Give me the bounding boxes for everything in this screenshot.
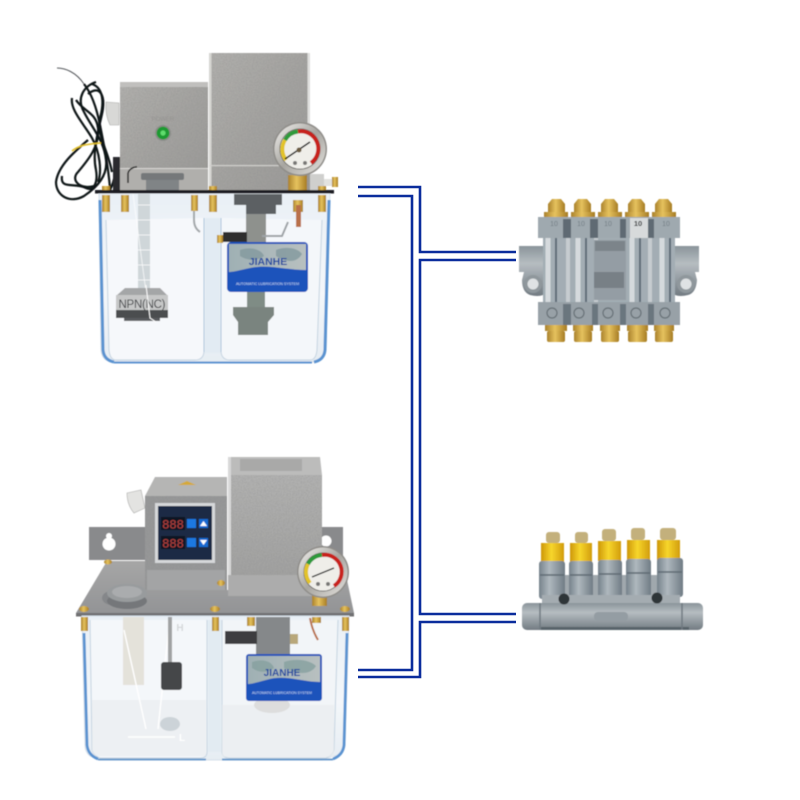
controller housing	[145, 477, 227, 590]
brass gauge fitting	[288, 175, 307, 191]
brass outlet nuts: top	[544, 199, 676, 217]
top band with flow numbers: 10	[634, 219, 642, 228]
float sensor	[161, 617, 182, 690]
button: up	[199, 519, 208, 528]
upper lubrication pump	[56, 53, 338, 362]
mounting bracket	[89, 527, 343, 567]
cable gland	[106, 102, 119, 125]
pump body	[225, 617, 318, 713]
level sensor stem	[133, 194, 150, 294]
display: lower: 888	[162, 538, 184, 552]
top plate	[95, 190, 334, 194]
digital timer panel	[155, 503, 215, 563]
lower five-port distributor	[522, 528, 703, 630]
high mark: H	[176, 623, 184, 634]
motor housing	[209, 53, 310, 191]
motor housing	[228, 457, 322, 596]
collar shadows	[540, 572, 682, 575]
pipe: riser between distributors	[420, 260, 516, 614]
top band with flow numbers: 10	[577, 221, 585, 228]
left mounting ear	[519, 246, 545, 296]
JIANHE label	[246, 654, 322, 701]
outlet necks	[546, 528, 676, 543]
button: function lower	[187, 538, 196, 547]
brass screws	[79, 560, 350, 631]
power indicator	[155, 125, 171, 141]
top plate	[76, 561, 354, 616]
mounting holes	[558, 592, 662, 604]
pipe: upper pump to upper distributor	[358, 187, 516, 252]
pressure gauge	[297, 546, 349, 598]
thin wire ends	[57, 68, 84, 84]
NPN float sensor	[116, 285, 168, 322]
JIANHE label: JIANHE	[249, 256, 287, 268]
top band with flow numbers: 10	[662, 221, 670, 228]
JIANHE label: AUTOMATIC LUBRICATION SYSTEM	[236, 282, 299, 286]
tank	[82, 616, 349, 760]
pressure gauge	[273, 122, 327, 176]
side outlet fitting	[310, 174, 338, 190]
pipe: upper pump to lower pump outlet	[358, 196, 412, 670]
rear bracket	[113, 157, 121, 191]
button: function upper	[187, 519, 196, 528]
display: upper: 888	[162, 518, 184, 532]
brass outlet nuts: bottom	[545, 325, 674, 342]
brass gauge stem	[312, 595, 327, 606]
pipe: lower pump to lower distributor	[358, 622, 516, 677]
cable tie	[72, 143, 101, 151]
manifold stem	[543, 575, 680, 603]
cable gland	[127, 490, 145, 513]
bottom band	[538, 302, 680, 325]
cable coil	[56, 82, 115, 199]
grey filler cap	[128, 167, 184, 191]
filler cap	[102, 584, 147, 609]
grey valve columns	[539, 558, 683, 599]
power label: POWER	[152, 117, 175, 123]
distributor body	[543, 238, 675, 302]
top band with flow numbers	[538, 217, 680, 238]
JIANHE label	[227, 242, 308, 292]
upper five-port distributor	[519, 199, 699, 342]
manifold bar	[522, 595, 703, 630]
right mounting ear	[673, 246, 699, 296]
level markings	[123, 617, 185, 744]
connecting pipes	[358, 187, 516, 677]
button: down	[199, 538, 208, 547]
control box	[120, 82, 208, 190]
lower lubrication pump	[76, 457, 354, 760]
yellow brass nuts	[541, 540, 680, 562]
plate screws	[102, 186, 326, 212]
JIANHE label: AUTOMATIC LUBRICATION SYSTEM	[252, 691, 312, 695]
JIANHE label: JIANHE	[264, 668, 301, 679]
pump assembly	[194, 194, 301, 335]
low mark: L	[179, 733, 185, 744]
transparent tank	[99, 192, 330, 362]
top band with flow numbers: 10	[550, 221, 558, 228]
NPN float sensor: NPN(NC)	[118, 299, 166, 311]
top band with flow numbers: 10	[604, 221, 612, 228]
